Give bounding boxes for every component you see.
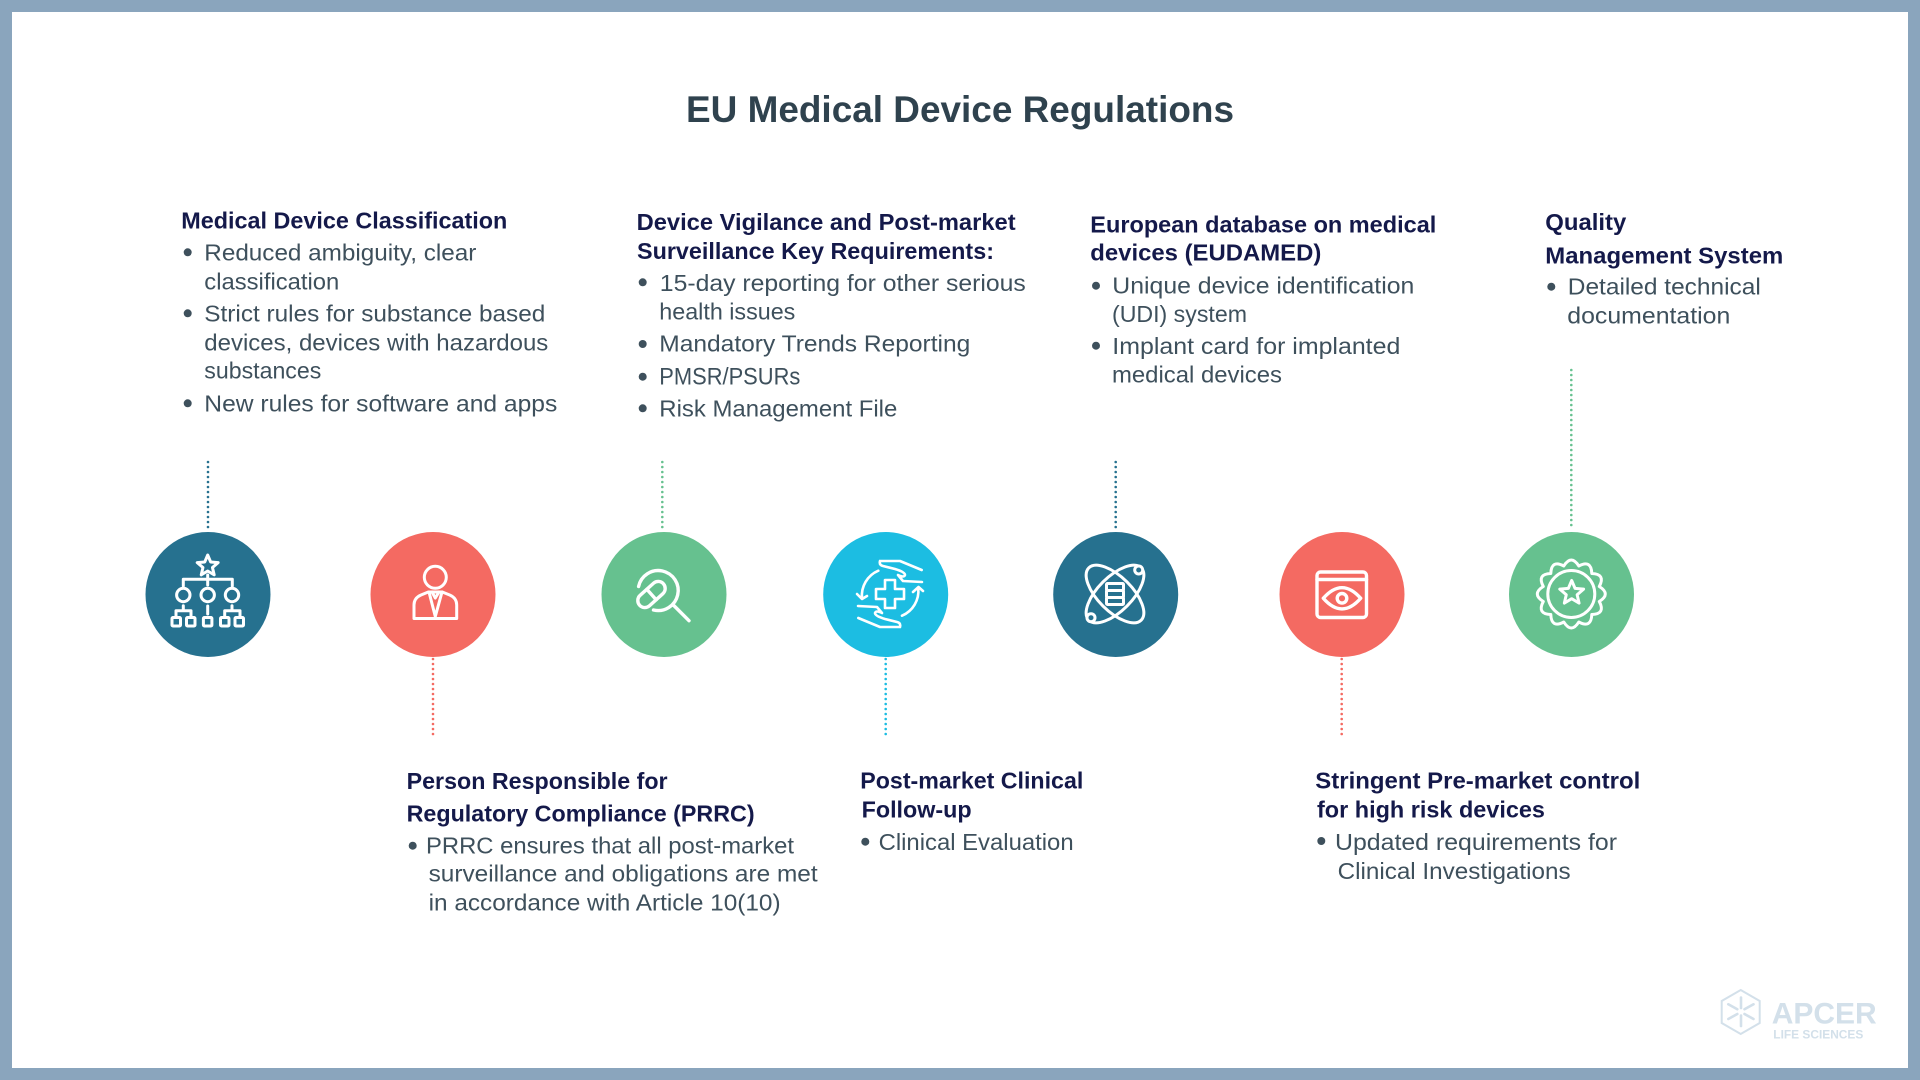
bullet list: EUDAMED: Implant card for implanted [1112,333,1400,359]
icon: database orbit [1053,532,1178,657]
connector: EUDAMED [1114,462,1117,530]
bullet list: PRRC: in accordance with Article 10(10) [429,890,781,916]
bullet list: quality [1547,273,1761,328]
heading: EUDAMED: devices (EUDAMED) [1090,240,1321,266]
panel: PRRC [407,768,818,916]
bullet list: quality: Detailed technical [1568,273,1761,299]
heading: follow-up: Post-market Clinical [860,767,1083,793]
connector: pre-market [1340,659,1343,735]
panel: quality management system [1545,209,1783,328]
bullet list: vigilance: PMSR/PSURs [659,363,800,390]
heading: EUDAMED [1090,212,1436,266]
bullet list: classification: New rules for software and apps [204,391,557,417]
bullet list: vigilance: Risk Management File [659,396,897,422]
connector: classification [207,462,209,530]
icon: quality badge [1509,532,1634,657]
bullet list: vigilance: Mandatory Trends Reporting [659,331,970,357]
logo mark [1722,990,1760,1034]
bullet list: classification: Strict rules for substance based [204,301,545,327]
logo tagline: LIFE SCIENCES [1773,1028,1864,1041]
heading: pre-market: for high risk devices [1317,797,1545,823]
icon: classification hierarchy [146,532,270,657]
panel: EUDAMED [1090,212,1436,388]
connector: follow-up [884,659,887,735]
panel: post-market clinical follow-up [860,767,1083,855]
panel: device vigilance [637,209,1026,422]
bullet list: vigilance: 15-day reporting for other serious [660,270,1026,296]
bullet list: EUDAMED: medical devices [1112,362,1282,388]
panel: stringent pre-market control [1315,767,1640,884]
bullet list: classification [184,240,557,417]
heading: device vigilance: Surveillance Key Requirements: [637,238,994,264]
connector: vigilance [661,462,664,530]
heading: pre-market: Stringent Pre-market control [1315,767,1640,793]
heading: pre-market [1315,767,1640,823]
bullet list: vigilance [639,270,1026,422]
bullet list: pre-market: Updated requirements for [1335,829,1617,855]
heading: device vigilance: Device Vigilance and Post-market [637,209,1016,235]
bullet list: classification: classification [204,268,339,294]
heading: medical device classification: Medical Device Classification [181,208,507,234]
connector: PRRC [432,659,434,735]
heading: EUDAMED: European database on medical [1090,212,1436,238]
bullet list: PRRC [409,832,818,916]
icon: pill magnifier [602,532,726,657]
bullet list: classification: devices, devices with hazardous [204,330,548,356]
bullet list: follow-up: Clinical Evaluation [879,829,1074,855]
heading: quality management system [1545,209,1783,268]
bullet list: vigilance: health issues [659,299,795,325]
heading: follow-up: Follow-up [862,797,972,823]
title: EU Medical Device Regulations [686,89,1234,130]
bullet list: quality: documentation [1567,302,1730,328]
bullet list: EUDAMED: (UDI) system [1112,301,1247,327]
heading: follow-up [860,767,1083,823]
heading: device vigilance [637,209,1016,264]
icon: eye in window [1280,532,1404,657]
heading: PRRC: Regulatory Compliance (PRRC) [407,801,755,827]
heading: quality management system: Quality [1545,209,1627,235]
bullet list: PRRC: surveillance and obligations are met [429,861,818,887]
bullet list: classification: Reduced ambiguity, clear [204,240,477,266]
connector: quality [1570,370,1573,530]
bullet list: EUDAMED: Unique device identification [1112,273,1414,299]
heading: quality management system: Management System [1545,242,1783,268]
panel: medical device classification [181,208,557,417]
icon: care hands and cross [823,532,948,657]
bullet list: PRRC: PRRC ensures that all post-market [426,832,795,858]
icon: responsible person [370,532,496,657]
heading: PRRC [407,768,755,827]
heading: PRRC: Person Responsible for [407,768,668,794]
bullet list: EUDAMED [1092,273,1414,388]
bullet list: pre-market [1317,829,1617,884]
bullet list: pre-market: Clinical Investigations [1338,858,1571,884]
logo wordmark: APCER [1772,997,1877,1030]
bullet list: classification: substances [204,357,321,383]
logo: APCER Life Sciences [1722,990,1877,1041]
